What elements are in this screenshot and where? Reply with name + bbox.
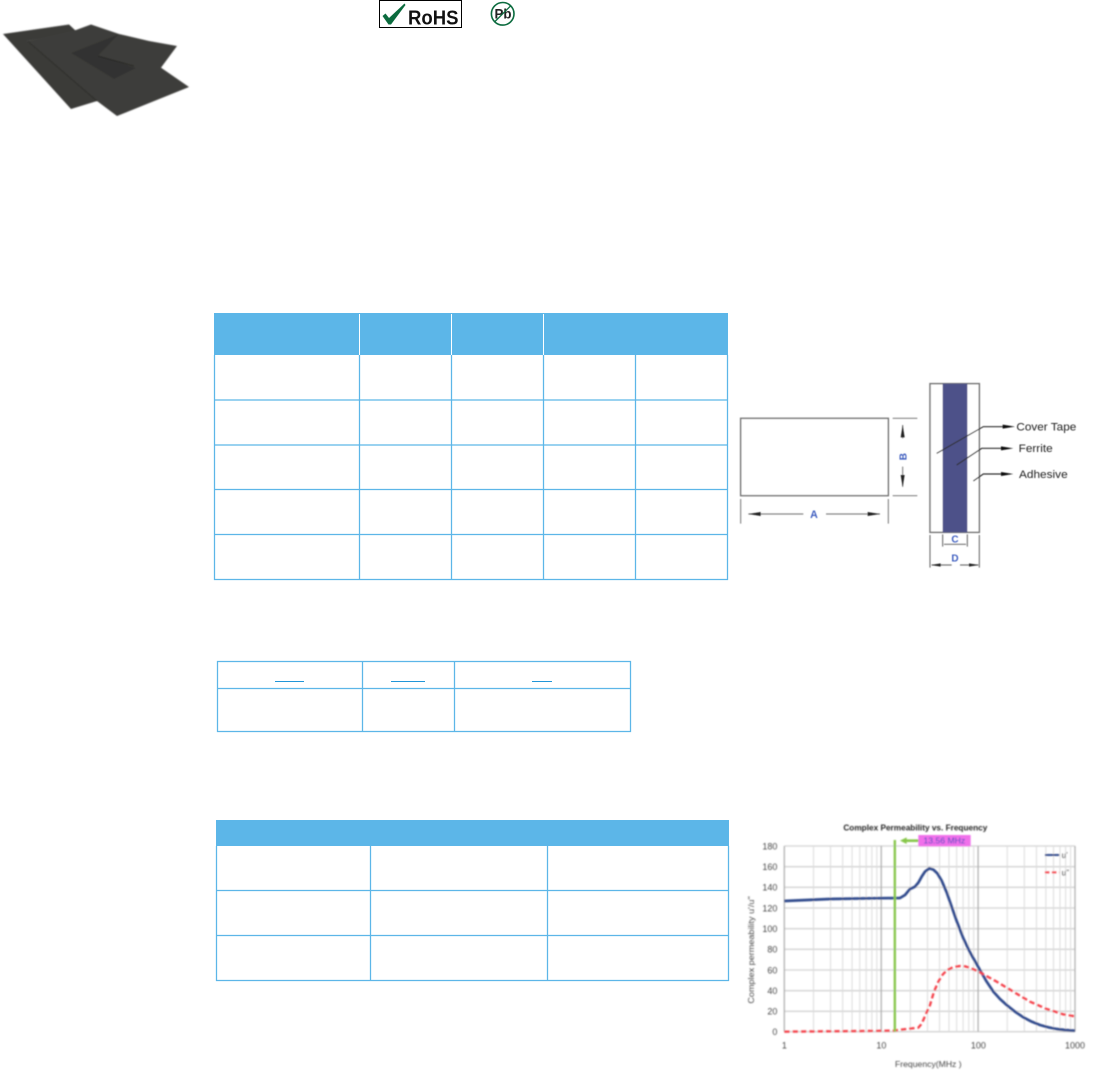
y axis labels: 180 <box>762 841 777 851</box>
product photo: ferrite sheets <box>3 24 189 116</box>
y axis labels: 40 <box>767 986 777 996</box>
x axis labels: 100 <box>971 1040 986 1050</box>
table header band <box>214 313 728 355</box>
grid <box>784 846 1075 1032</box>
layer callouts: Adhesive <box>1019 469 1068 481</box>
icon: lead free <box>491 2 514 25</box>
x axis title: Frequency(MHz ) <box>895 1059 962 1069</box>
x axis labels <box>782 1040 1085 1050</box>
y axis labels: 60 <box>767 965 777 975</box>
y axis labels: 0 <box>772 1027 777 1037</box>
layer callouts: Cover Tape <box>1016 421 1076 433</box>
y axis title: Complex permeability u'/u" <box>746 896 756 1004</box>
line chart: complex permeability vs frequency <box>746 823 1085 1069</box>
y axis labels: 160 <box>762 862 777 872</box>
marker: 13.56 MHz line: 13.56 MHz <box>923 836 965 846</box>
table: properties <box>216 820 729 980</box>
legend: u' <box>1062 851 1068 860</box>
legend: u'' <box>1062 868 1070 877</box>
top view outline with A and B dimensions: A <box>810 509 818 521</box>
layer callouts <box>937 421 1076 481</box>
curve u' <box>784 868 1075 1031</box>
icon: RoHS badge: RoHS <box>408 8 458 30</box>
curve u'' <box>784 966 1077 1032</box>
section view with layers: D <box>951 554 959 565</box>
x axis labels: 1 <box>782 1040 787 1050</box>
x axis labels: 10 <box>876 1040 886 1050</box>
y axis labels: 140 <box>762 883 777 893</box>
x axis labels: 1000 <box>1065 1040 1085 1050</box>
y axis labels: 100 <box>762 924 777 934</box>
diagram: sheet dimensions and layer structure <box>741 384 1076 568</box>
icon: RoHS badge <box>380 0 462 30</box>
table: packaging <box>218 662 630 732</box>
marker: 13.56 MHz line <box>894 835 971 1032</box>
table header band <box>216 820 729 846</box>
legend <box>1045 851 1070 877</box>
top view outline with A and B dimensions <box>741 418 917 524</box>
y axis labels: 120 <box>762 903 777 913</box>
y axis labels: 80 <box>767 945 777 955</box>
section view with layers <box>930 384 979 568</box>
table: dimensions <box>214 313 728 580</box>
layer callouts: Ferrite <box>1019 443 1053 455</box>
icon: lead free: Pb <box>494 6 512 22</box>
y axis labels: 20 <box>767 1007 777 1017</box>
chart title: Complex Permeability vs. Frequency <box>843 823 988 832</box>
section view with layers: C <box>951 535 959 546</box>
y axis labels <box>762 841 777 1037</box>
top view outline with A and B dimensions: B <box>899 453 910 460</box>
header underlines <box>275 680 552 682</box>
